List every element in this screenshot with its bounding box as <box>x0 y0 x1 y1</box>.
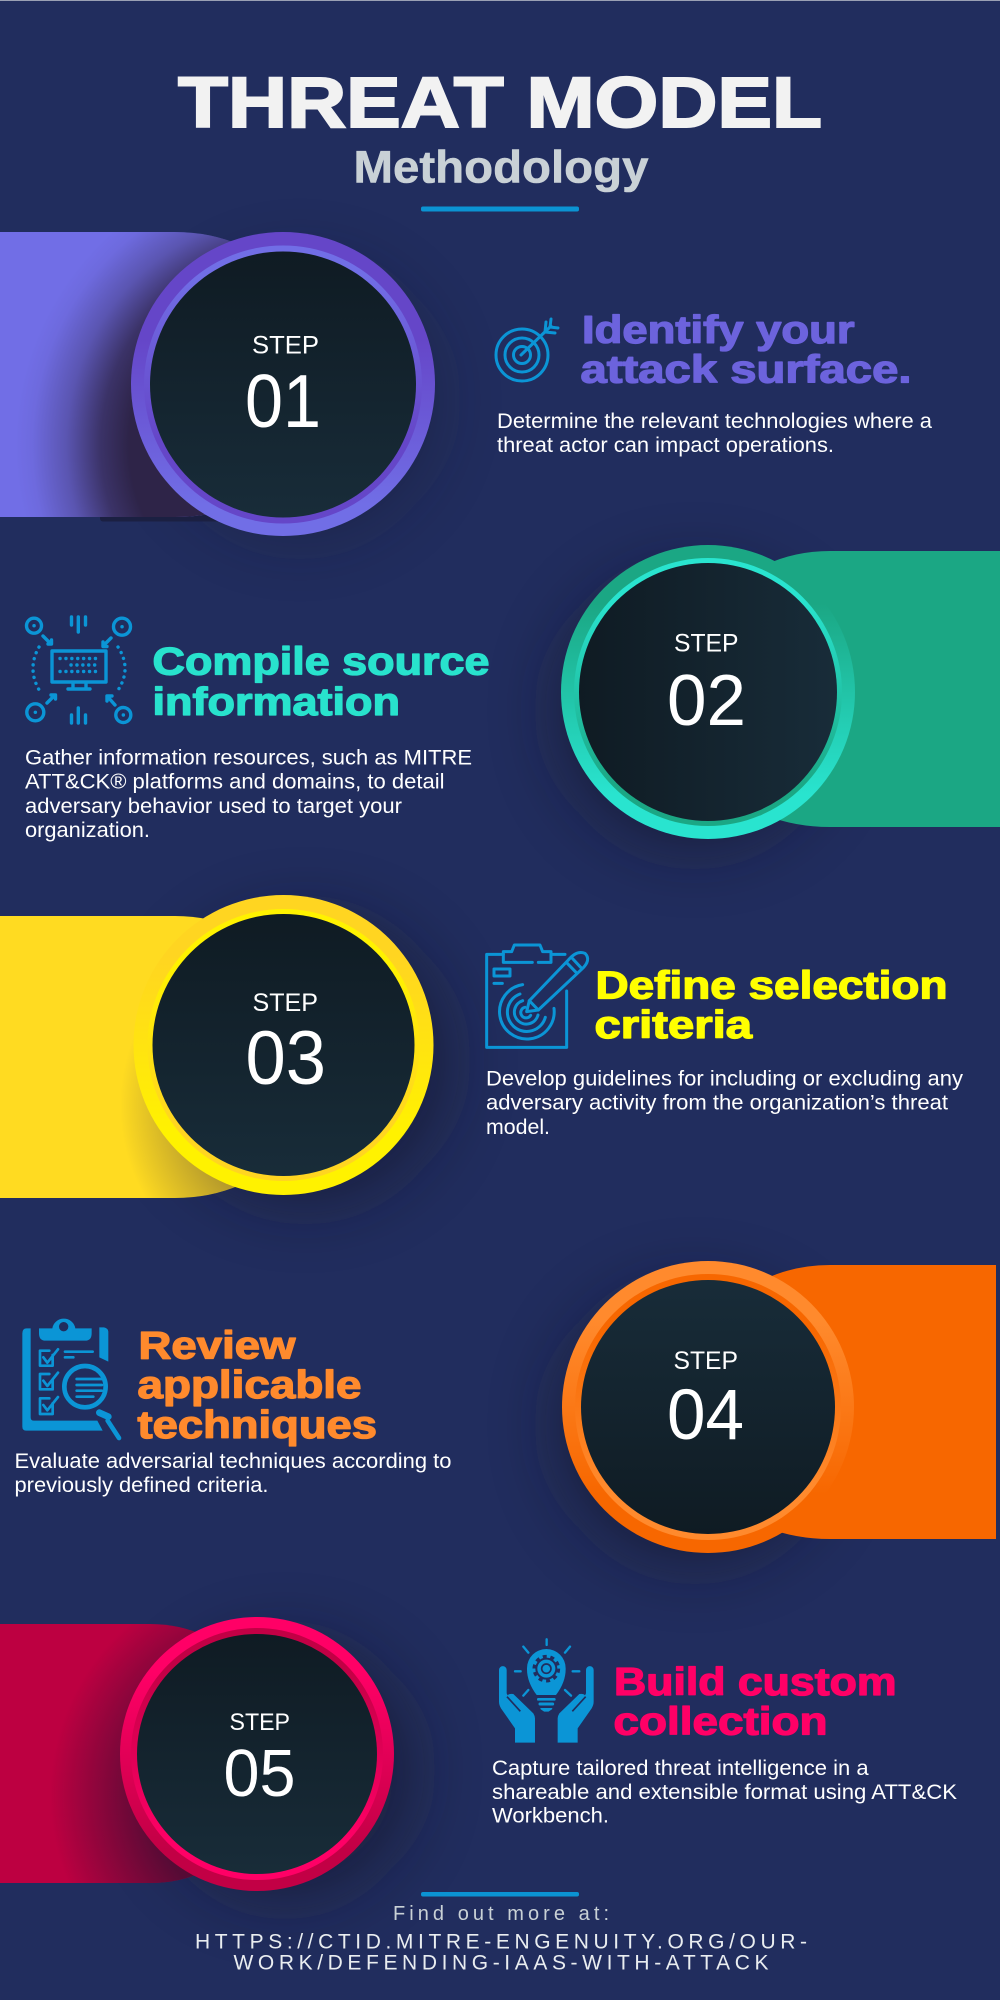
description <box>497 409 932 457</box>
colour band <box>0 916 240 1198</box>
step circle <box>134 895 434 1195</box>
step circle <box>561 545 855 839</box>
heading: techniques <box>138 1404 377 1447</box>
description: Capture tailored threat intelligence in a <box>492 1756 869 1780</box>
heading <box>580 309 912 392</box>
step label: STEP <box>230 1709 290 1736</box>
step label: STEP <box>674 1347 738 1375</box>
description: Workbench. <box>492 1804 609 1828</box>
description: Evaluate adversarial techniques according to <box>14 1449 452 1473</box>
heading <box>152 640 490 724</box>
heading: criteria <box>594 1004 753 1047</box>
colour band <box>765 1265 996 1539</box>
subtitle: Methodology <box>354 142 649 192</box>
heading <box>594 964 948 1047</box>
colour band <box>0 232 240 517</box>
heading: information <box>152 681 400 724</box>
heading: Compile source <box>152 640 490 684</box>
band shadow <box>0 232 240 517</box>
circle shadow <box>160 260 440 540</box>
panel: step 02 <box>25 545 1000 850</box>
icon: monitor network <box>26 617 131 723</box>
band shadow <box>0 916 240 1198</box>
colour band <box>0 1624 205 1883</box>
heading: applicable <box>138 1364 362 1407</box>
circle shadow (behind) <box>160 915 450 1205</box>
description <box>486 1066 963 1139</box>
band shadow <box>0 1624 205 1883</box>
panel: step 03 <box>0 895 963 1205</box>
heading: Build custom <box>614 1661 896 1704</box>
description <box>492 1756 958 1828</box>
description: ATT&CK® platforms and domains, to detail <box>25 770 444 794</box>
step number: 02 <box>667 661 746 741</box>
step label: STEP <box>252 989 318 1017</box>
description: model. <box>486 1115 550 1139</box>
circle shadow (behind) <box>155 1640 415 1900</box>
description: previously defined criteria. <box>14 1473 268 1497</box>
heading: Define selection <box>596 964 948 1008</box>
footer url <box>195 1931 807 1974</box>
heading: collection <box>614 1700 828 1744</box>
heading: Review <box>138 1324 297 1367</box>
icon: hands holding light bulb <box>499 1639 594 1743</box>
panel: step 04 <box>14 1261 996 1565</box>
footer url: HTTPS://CTID.MITRE-ENGENUITY.ORG/OUR- <box>195 1931 807 1954</box>
title: THREAT MODEL <box>178 64 822 143</box>
step circle <box>131 232 435 536</box>
description: organization. <box>25 818 150 842</box>
description: shareable and extensible format using ATT&CK <box>492 1780 958 1804</box>
description: threat actor can impact operations. <box>497 433 834 457</box>
heading: attack surface. <box>580 348 912 392</box>
description <box>14 1449 452 1497</box>
icon: checklist magnifier <box>22 1319 119 1438</box>
step number: 03 <box>246 1016 326 1101</box>
icon: clipboard target pencil <box>487 945 588 1047</box>
heading <box>614 1661 896 1744</box>
description <box>25 746 472 842</box>
description: Develop guidelines for including or excluding any <box>486 1066 963 1090</box>
panel: step 05 <box>0 1617 958 1900</box>
step number: 05 <box>224 1736 296 1811</box>
step circle <box>120 1617 394 1891</box>
dark strip under band <box>100 514 225 522</box>
step circle <box>562 1261 854 1553</box>
footer url: WORK/DEFENDING-IAAS-WITH-ATTACK <box>234 1952 768 1974</box>
circle shadow <box>555 570 835 850</box>
step number: 01 <box>245 359 321 443</box>
heading <box>138 1324 377 1447</box>
step number: 04 <box>667 1376 744 1455</box>
step label: STEP <box>674 630 738 658</box>
description: adversary activity from the organization’s threat <box>486 1091 948 1115</box>
heading: Identify your <box>582 309 855 352</box>
description: Gather information resources, such as MITRE <box>25 746 472 770</box>
circle shadow <box>555 1285 835 1565</box>
icon: target <box>496 319 558 381</box>
title underline <box>421 206 579 212</box>
footer prompt: Find out more at: <box>393 1903 609 1925</box>
description: Determine the relevant technologies where a <box>497 409 932 433</box>
step label: STEP <box>252 332 319 360</box>
colour band <box>765 551 1000 827</box>
footer underline <box>421 1892 579 1896</box>
description: adversary behavior used to target your <box>25 794 402 818</box>
panel: step 01 <box>0 232 932 540</box>
